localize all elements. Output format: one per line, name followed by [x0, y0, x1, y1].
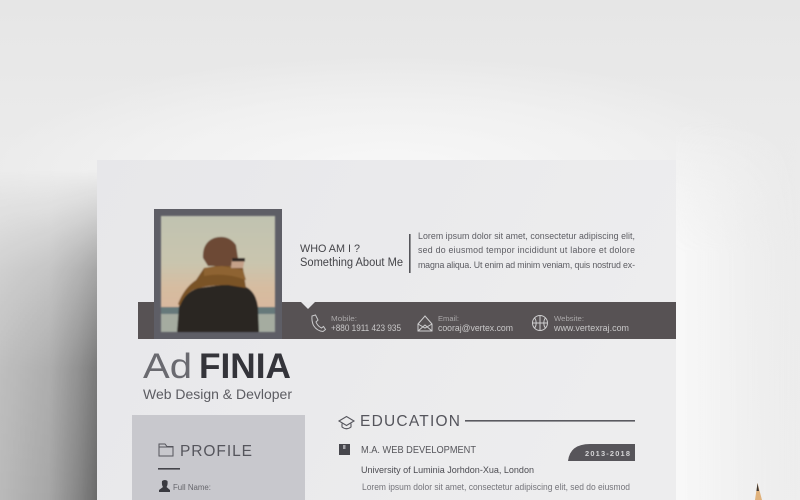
contact: mobile: +880 1911 423 935 [331, 323, 401, 333]
contact: website: www.vertexraj.com [553, 323, 629, 333]
name title: FINIA [199, 347, 291, 386]
education heading: EDUCATION [360, 413, 460, 430]
contact: email: Email: [438, 314, 459, 323]
profile heading: PROFILE [180, 443, 252, 460]
about text: Lorem ipsum dolor sit amet, consectetur adipiscing elit, [418, 231, 635, 241]
name title: Ad [143, 347, 192, 386]
contact: email: cooraj@vertex.com [438, 323, 513, 333]
icon: folder [159, 444, 173, 456]
job subtitle: Web Design & Devloper [143, 386, 292, 402]
university: University of Luminia Jorhdon-Xua, London [361, 465, 534, 476]
icon: envelope [418, 316, 432, 331]
name title [143, 347, 291, 386]
who am i heading [300, 243, 403, 269]
resume sheet [97, 160, 676, 500]
profile rule [158, 468, 180, 470]
date badge [568, 444, 635, 461]
panel: profile [132, 415, 305, 500]
paper shadow [0, 170, 98, 500]
contact: mobile [312, 314, 401, 333]
header band [138, 302, 676, 339]
about text [418, 231, 635, 270]
icon: person [159, 480, 170, 492]
about text: magna aliqua. Ut enim ad minim veniam, quis nostrud ex- [418, 260, 635, 270]
contact: email [418, 314, 513, 333]
who am i heading: Something About Me [300, 257, 403, 269]
about text: sed do eiusmod tempor incididunt ut labore et dolore [418, 245, 635, 255]
photo frame [154, 209, 282, 339]
icon: phone [312, 315, 326, 332]
portrait photo [154, 209, 282, 339]
icon: globe [532, 316, 548, 330]
band pointer [301, 302, 315, 309]
description: Lorem ipsum dolor sit amet, consectetur adipiscing elit, sed do eiusmod [362, 482, 630, 492]
heading rule [465, 420, 635, 422]
vertical divider [409, 234, 411, 273]
icon: book [339, 444, 350, 455]
contact: website [532, 314, 629, 333]
photo image [161, 216, 275, 332]
degree title: M.A. WEB DEVELOPMENT [361, 445, 476, 456]
date badge: 2013-2018 [585, 449, 630, 458]
contact: mobile: Mobile: [331, 314, 357, 323]
full name label: Full Name: [173, 483, 211, 492]
who am i heading: WHO AM I ? [300, 243, 360, 255]
panel: education [339, 413, 635, 492]
icon: graduation cap [339, 416, 354, 429]
contact: website: Website: [554, 314, 584, 323]
pencil [755, 483, 762, 500]
